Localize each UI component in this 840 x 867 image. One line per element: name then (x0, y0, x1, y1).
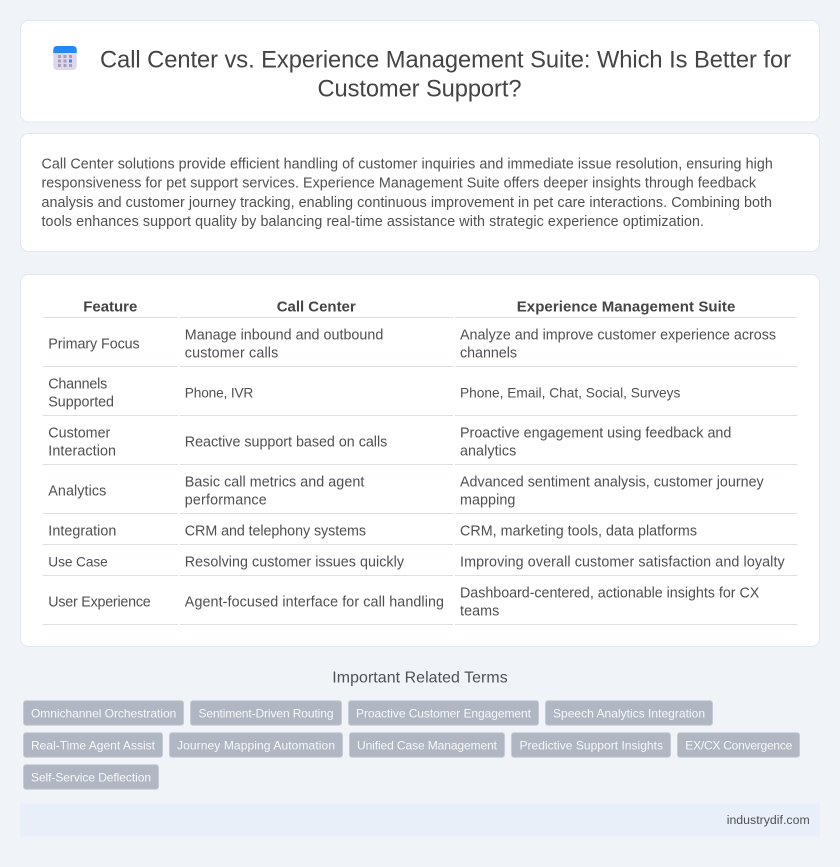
row: integration (48, 523, 697, 539)
row: user experience: Dashboard-centered, actionable insights for CX (460, 585, 760, 601)
row: customer interaction: Customer (48, 425, 111, 441)
description text: responsiveness for pet support services. Experience Management Suite offers deeper insights through feedback (42, 176, 757, 192)
panel: description (20, 134, 820, 252)
row: user experience: User Experience (48, 594, 151, 610)
row: channels supported: Supported (48, 394, 114, 410)
row: customer interaction (48, 425, 731, 459)
row: use case: Improving overall customer satisfaction and loyalty (460, 554, 786, 570)
chip: unified case management: Unified Case Management (357, 738, 498, 752)
title (100, 48, 791, 102)
row: channels supported: Phone, IVR (185, 385, 253, 400)
row: primary focus: Analyze and improve customer experience across (460, 327, 776, 343)
chip: speech analytics integration (546, 701, 712, 725)
chip: sentiment-driven routing: Sentiment-Driven Routing (198, 706, 334, 720)
panel: comparison table (20, 274, 820, 646)
row: primary focus: channels (460, 345, 517, 361)
chip: ex/cx convergence (678, 733, 800, 757)
row: user experience: teams (460, 603, 499, 619)
chip: real-time agent assist (24, 733, 162, 757)
row: analytics (48, 474, 765, 508)
row: integration: CRM and telephony systems (185, 523, 366, 539)
description text: tools enhances support quality by balancing real-time assistance with strategic experience optimization. (42, 214, 704, 230)
chip: self-service deflection: Self-Service Deflection (31, 770, 151, 784)
row: channels supported: Channels (48, 376, 107, 392)
chip: sentiment-driven routing (190, 701, 342, 725)
row: analytics: Basic call metrics and agent (185, 474, 364, 490)
row: primary focus: Manage inbound and outbound (185, 327, 383, 343)
row: primary focus: customer calls (185, 345, 278, 361)
chip: real-time agent assist: Real-Time Agent Assist (31, 738, 156, 752)
table header row: Feature (83, 299, 137, 316)
chip: proactive customer engagement (348, 701, 538, 725)
chip: ex/cx convergence: EX/CX Convergence (685, 738, 793, 752)
table header row (83, 299, 735, 316)
chip: predictive support insights: Predictive Support Insights (520, 738, 663, 752)
row: analytics: Advanced sentiment analysis, customer journey (460, 474, 765, 490)
table header row: Experience Management Suite (517, 299, 735, 316)
row: analytics: performance (185, 492, 267, 508)
footer bar (20, 803, 820, 837)
title: Customer Support? (318, 76, 522, 102)
row: use case: Use Case (48, 554, 108, 569)
chip: omnichannel orchestration (24, 701, 184, 725)
icon: calendar (53, 46, 77, 70)
chip: unified case management (350, 733, 504, 757)
row: channels supported: Phone, Email, Chat, Social, Surveys (460, 385, 680, 400)
chip: proactive customer engagement: Proactive Customer Engagement (356, 706, 532, 720)
row: channels supported (48, 376, 680, 410)
row: primary focus: Primary Focus (48, 336, 140, 352)
row: customer interaction: analytics (460, 443, 516, 459)
description text: Call Center solutions provide efficient handling of customer inquiries and immediate issue resolution, ensuring high (42, 156, 773, 172)
related term chips (24, 701, 800, 789)
chip: speech analytics integration: Speech Analytics Integration (553, 706, 705, 720)
header panel (20, 20, 820, 122)
row: customer interaction: Proactive engagement using feedback and (460, 425, 731, 441)
row: integration: CRM, marketing tools, data platforms (460, 523, 697, 539)
description text: analysis and customer journey tracking, enabling continuous improvement in pet care interactions. Combining both (42, 195, 772, 211)
row: analytics: mapping (460, 492, 515, 508)
footer bar: industrydif.com (727, 813, 810, 827)
chip: omnichannel orchestration: Omnichannel Orchestration (31, 706, 176, 720)
heading: important related terms: Important Related Terms (332, 670, 508, 687)
description text (42, 156, 773, 230)
chip: journey mapping automation: Journey Mapping Automation (177, 738, 335, 752)
row: user experience: Agent-focused interface for call handling (185, 594, 444, 610)
row: primary focus (48, 327, 776, 361)
row: user experience (48, 585, 760, 619)
chip: self-service deflection (24, 765, 158, 789)
title: Call Center vs. Experience Management Suite: Which Is Better for (100, 48, 791, 74)
row: analytics: Analytics (48, 483, 106, 499)
row: use case (48, 554, 786, 570)
row: use case: Resolving customer issues quickly (185, 554, 405, 570)
table row lines (43, 317, 797, 625)
chip: journey mapping automation (170, 733, 342, 757)
table header row: Call Center (277, 299, 356, 316)
chip: predictive support insights (512, 733, 670, 757)
row: integration: Integration (48, 523, 116, 539)
row: customer interaction: Reactive support based on calls (185, 434, 387, 450)
row: customer interaction: Interaction (48, 443, 116, 459)
